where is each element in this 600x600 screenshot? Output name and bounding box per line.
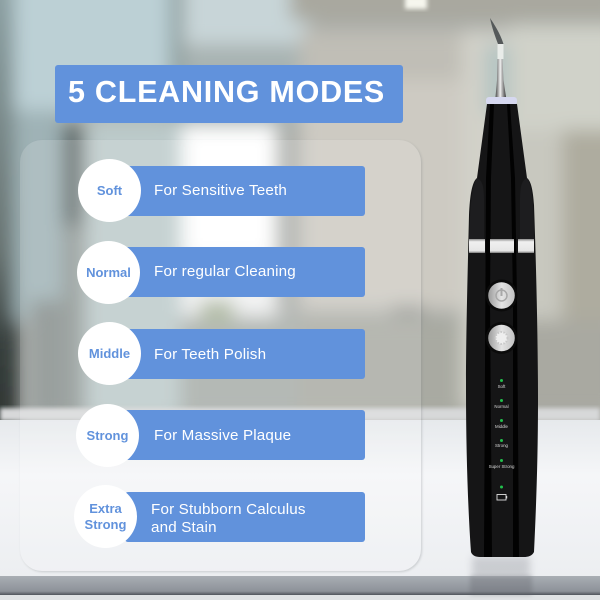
row: Normal mode	[77, 241, 365, 304]
badge: Soft: Soft	[97, 182, 122, 198]
mode indicator lights and labels: Super Strong	[489, 464, 515, 469]
badge: Normal: Normal	[86, 264, 131, 280]
title	[55, 65, 403, 123]
pen body	[466, 97, 538, 557]
panel: translucent modes card	[20, 140, 421, 571]
mode indicator lights and labels: Soft	[498, 384, 506, 389]
row: Soft mode	[78, 159, 365, 222]
badge: Strong	[76, 404, 139, 467]
text: For Teeth Polish	[125, 329, 365, 379]
row: Strong mode	[76, 404, 365, 467]
text: For Stubborn Calculus and Stain	[125, 492, 365, 542]
text: For Massive Plaque	[125, 410, 365, 460]
text: For regular Cleaning	[125, 247, 365, 297]
text: For Stubborn Calculus and Stain: For Stubborn Calculus	[151, 501, 306, 518]
mode indicator lights and labels: Strong	[495, 443, 509, 448]
text: For Sensitive Teeth: For Sensitive Teeth	[154, 182, 287, 199]
badge: Extra Strong: Extra	[89, 500, 122, 516]
mode indicator lights and labels: Middle	[495, 424, 509, 429]
row: Middle mode	[78, 322, 365, 385]
mode indicator lights and labels: Normal	[494, 404, 509, 409]
icon: power button	[486, 280, 518, 312]
badge: Middle: Middle	[89, 346, 130, 360]
text: For Sensitive Teeth	[125, 166, 365, 216]
badge: Strong: Strong	[87, 428, 128, 442]
mode indicator lights and labels	[489, 379, 515, 500]
row: Extra Strong mode	[74, 485, 365, 548]
text: For Massive Plaque: For Massive Plaque	[154, 427, 291, 444]
icon: scaler tip	[490, 18, 506, 97]
icon: mode button	[486, 322, 518, 354]
title: 5 CLEANING MODES	[68, 75, 385, 109]
badge: Soft	[78, 159, 141, 222]
text: For regular Cleaning: For regular Cleaning	[154, 263, 296, 280]
text: For Teeth Polish: For Teeth Polish	[154, 346, 266, 363]
text: For Stubborn Calculus and Stain: and Stain	[151, 519, 217, 536]
product: black ultrasonic dental scaler	[466, 18, 538, 557]
badge: Middle	[78, 322, 141, 385]
badge: Normal	[77, 241, 140, 304]
badge: Extra Strong: Strong	[85, 516, 126, 532]
badge: Extra Strong	[74, 485, 137, 548]
